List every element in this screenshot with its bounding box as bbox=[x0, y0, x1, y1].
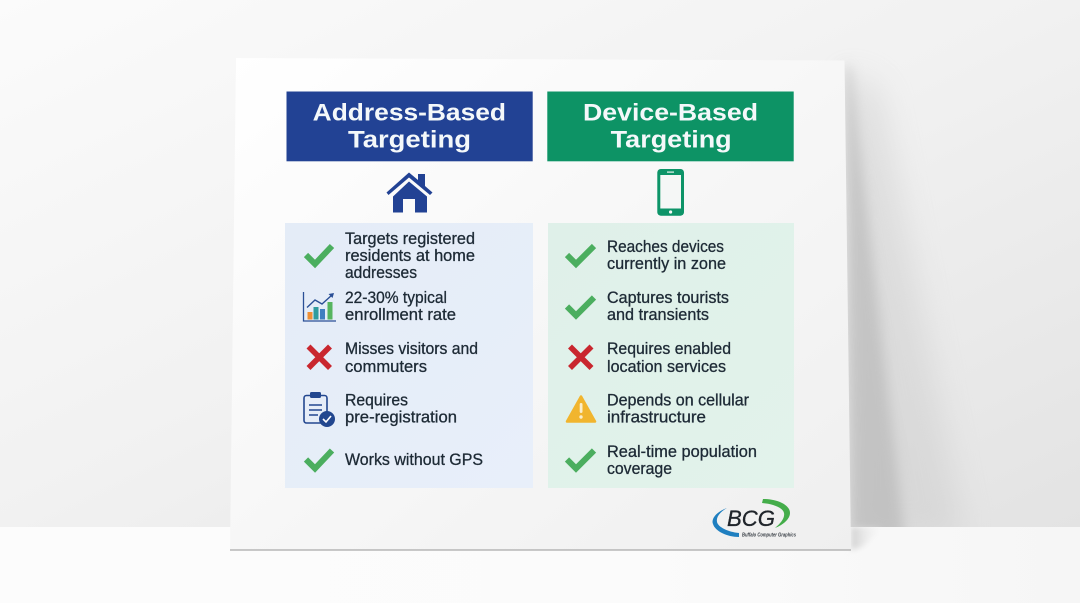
text: reaches devices bbox=[607, 238, 726, 273]
board shadow on wall bbox=[844, 64, 955, 527]
text: enrollment rate bbox=[345, 289, 456, 324]
icon: house bbox=[386, 172, 432, 212]
text: targets registered: addresses bbox=[345, 264, 417, 282]
text: depends on cellular: Depends on cellular bbox=[607, 392, 750, 410]
icon: check bbox=[567, 450, 594, 468]
text: misses visitors bbox=[345, 340, 478, 376]
text: pre-registration: Requires bbox=[345, 392, 408, 410]
heading: address-based bbox=[286, 92, 533, 161]
text: depends on cellular bbox=[607, 392, 750, 427]
icon: check bbox=[306, 246, 332, 264]
text: real-time population: Real-time population bbox=[607, 443, 757, 461]
heading: device-based bbox=[547, 92, 794, 161]
text: captures tourists bbox=[607, 289, 729, 324]
text: requires enabled: location services bbox=[607, 358, 726, 376]
feature list: device-based bbox=[548, 223, 794, 488]
text: pre-registration bbox=[345, 392, 457, 427]
text: requires enabled bbox=[607, 340, 731, 376]
icon: cross bbox=[308, 346, 330, 368]
logo tagline: Buffalo Computer Graphics bbox=[742, 532, 796, 538]
heading: address-based: Targeting bbox=[348, 126, 471, 153]
text: targets registered: Targets registered bbox=[345, 230, 475, 248]
icon: warning triangle bbox=[567, 396, 595, 422]
icon: cross bbox=[570, 346, 592, 368]
heading: device-based: Device-Based bbox=[583, 99, 758, 126]
text: misses visitors: commuters bbox=[345, 358, 427, 376]
feature list: address-based bbox=[285, 223, 533, 488]
board bbox=[230, 58, 851, 550]
text: works without gps: Works without GPS bbox=[345, 451, 483, 469]
panel: address-based column bbox=[285, 92, 533, 488]
blue arc bbox=[713, 508, 739, 537]
icon: clipboard with check badge bbox=[304, 392, 335, 427]
text: reaches devices: currently in zone bbox=[607, 255, 726, 273]
icon: check bbox=[306, 450, 332, 468]
icon: check bbox=[567, 246, 594, 264]
text: targets registered: residents at home bbox=[345, 247, 475, 265]
text: enrollment rate: 22-30% typical bbox=[345, 289, 447, 307]
text: reaches devices: Reaches devices bbox=[607, 238, 724, 256]
text: captures tourists: Captures tourists bbox=[607, 289, 729, 307]
icon: check bbox=[567, 298, 594, 316]
heading: address-based: Address-Based bbox=[313, 99, 506, 126]
panel: device-based column bbox=[547, 92, 794, 488]
text: pre-registration: pre-registration bbox=[345, 409, 457, 427]
board shadow on floor bbox=[851, 527, 885, 550]
text: targets registered bbox=[345, 230, 475, 282]
green arc bbox=[762, 499, 790, 528]
text: enrollment rate: enrollment rate bbox=[345, 306, 456, 324]
floor bbox=[0, 527, 1080, 603]
text: misses visitors: Misses visitors and bbox=[345, 340, 478, 358]
text: real-time population: coverage bbox=[607, 460, 672, 478]
text: depends on cellular: infrastructure bbox=[607, 409, 706, 427]
icon: chart bbox=[304, 292, 336, 321]
icon: smartphone bbox=[657, 169, 684, 216]
logo letters: BCG bbox=[727, 506, 775, 531]
logo: BCG bbox=[713, 499, 796, 538]
text: real-time population bbox=[607, 443, 757, 478]
text: requires enabled: Requires enabled bbox=[607, 340, 731, 358]
text: captures tourists: and transients bbox=[607, 306, 709, 324]
heading: device-based: Targeting bbox=[611, 126, 732, 153]
